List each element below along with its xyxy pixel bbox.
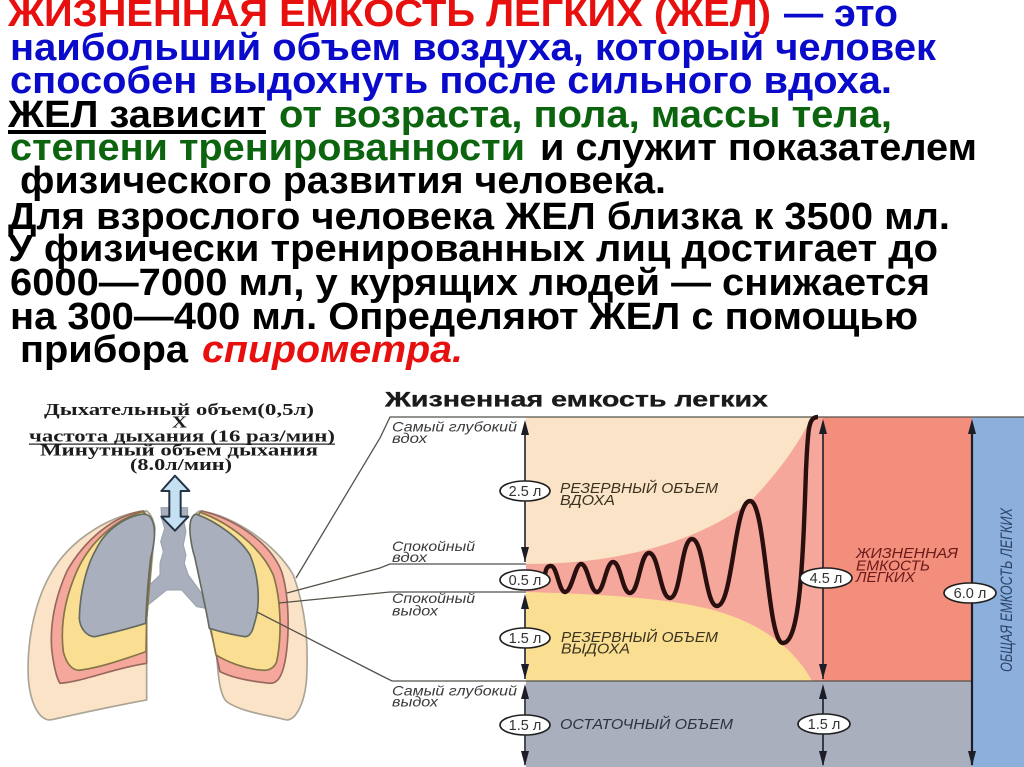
dependence line 1: от возраста, пола, массы тела, bbox=[279, 94, 892, 136]
expiratory reserve region bbox=[526, 592, 812, 681]
quiet inhale label: Спокойный bbox=[392, 538, 475, 554]
trained people line: У физически тренированных лиц достигает до bbox=[8, 228, 938, 270]
value badge 1.5 right: 1.5 л bbox=[808, 717, 840, 733]
expiratory reserve label: РЕЗЕРВНЫЙ ОБЪЕМ bbox=[561, 628, 719, 646]
definition line 3: способен выдохнуть после сильного вдоха. bbox=[10, 60, 892, 102]
inspiratory reserve label: РЕЗЕРВНЫЙ ОБЪЕМ bbox=[560, 479, 719, 497]
deepest inhale label: Самый глубокий bbox=[392, 418, 517, 434]
value badge 1.5 expiratory bbox=[500, 628, 550, 648]
smokers line: 6000—7000 мл, у курящих людей — снижается bbox=[10, 262, 930, 304]
underline under ЖЕЛ зависит bbox=[8, 130, 266, 134]
deepest exhale label: Самый глубокий bbox=[392, 682, 517, 698]
minute volume value: (8.0л/мин) bbox=[130, 455, 232, 474]
dimension arrows bbox=[525, 424, 972, 765]
chart: lung volumes bbox=[257, 388, 1024, 767]
inspiratory reserve region bbox=[526, 417, 812, 564]
chart title: Жизненная емкость легких bbox=[384, 388, 768, 412]
vital capacity label line 2: ЕМКОСТЬ bbox=[856, 558, 930, 574]
vital capacity background bbox=[526, 417, 823, 681]
breathing rate: частота дыхания (16 раз/мин) bbox=[29, 426, 335, 446]
quiet inhale label line 2: вдох bbox=[392, 549, 428, 565]
value badge 2.5: 2.5 л bbox=[509, 484, 541, 500]
value badge 6.0: 6.0 л bbox=[954, 586, 986, 602]
value badge 1.5 residual: 1.5 л bbox=[509, 718, 541, 734]
value badge 1.5 expiratory: 1.5 л bbox=[509, 631, 541, 647]
multiply sign: Х bbox=[172, 412, 187, 432]
quiet exhale label line 2: выдох bbox=[392, 602, 439, 618]
expiratory reserve label line 2: ВЫДОХА bbox=[561, 642, 630, 658]
vital capacity column bbox=[823, 417, 972, 681]
region labels bbox=[560, 479, 1016, 733]
definition text block bbox=[7, 0, 977, 371]
deepest exhale label line 2: выдох bbox=[392, 694, 439, 710]
vital capacity label line 3: ЛЕГКИХ bbox=[855, 570, 916, 586]
spirometer line: спирометра. bbox=[202, 329, 463, 371]
breathing wave bbox=[545, 417, 818, 643]
minute ventilation formula bbox=[29, 400, 335, 474]
lungs diagram bbox=[28, 476, 307, 720]
inspiratory reserve label line 2: ВДОХА bbox=[560, 493, 615, 509]
value badge 0.5 bbox=[500, 570, 550, 590]
value badge 4.5 bbox=[800, 568, 852, 588]
value badge 1.5 residual bbox=[500, 715, 550, 735]
adult value line: Для взрослого человека ЖЕЛ близка к 3500 мл. bbox=[8, 196, 950, 238]
quiet exhale label: Спокойный bbox=[392, 590, 475, 606]
total capacity column bbox=[972, 417, 1024, 767]
leader lines bbox=[257, 417, 1024, 681]
tidal volume: Дыхательный объем(0,5л) bbox=[44, 400, 314, 419]
value badge 2.5 bbox=[500, 481, 550, 501]
value badge 0.5: 0.5 л bbox=[509, 573, 541, 589]
total capacity vertical label: ОБЩАЯ ЕМКОСТЬ ЛЕГКИХ bbox=[997, 508, 1016, 672]
dependence line 3: физического развития человека. bbox=[20, 160, 666, 202]
trachea and bronchi bbox=[146, 508, 205, 608]
left lung bbox=[28, 511, 155, 720]
residual volume label: ОСТАТОЧНЫЙ ОБЪЕМ bbox=[560, 715, 734, 733]
vital capacity label: ЖИЗНЕННАЯ bbox=[855, 546, 958, 562]
point labels bbox=[392, 418, 517, 710]
dependence line 1: ЖЕЛ зависит bbox=[7, 94, 266, 136]
fraction line bbox=[29, 444, 335, 445]
measurement line: на 300—400 мл. Определяют ЖЕЛ с помощью bbox=[10, 296, 918, 338]
residual volume region bbox=[526, 681, 972, 767]
value badge 1.5 right bbox=[798, 714, 850, 734]
dependence line 2: степени тренированности bbox=[10, 127, 525, 169]
arrowheads bbox=[521, 419, 976, 766]
dependence line 2: и служит показателем bbox=[540, 127, 977, 169]
value badge 4.5: 4.5 л bbox=[810, 571, 842, 587]
right lung bbox=[190, 511, 307, 720]
definition line 2: наибольший объем воздуха, который человек bbox=[10, 27, 937, 69]
spirometer line: прибора bbox=[20, 329, 189, 371]
value badge 6.0 bbox=[944, 583, 996, 603]
minute volume: Минутный объем дыхания bbox=[40, 440, 318, 460]
icon: airflow double arrow bbox=[161, 476, 189, 531]
deepest inhale label line 2: вдох bbox=[392, 430, 428, 446]
